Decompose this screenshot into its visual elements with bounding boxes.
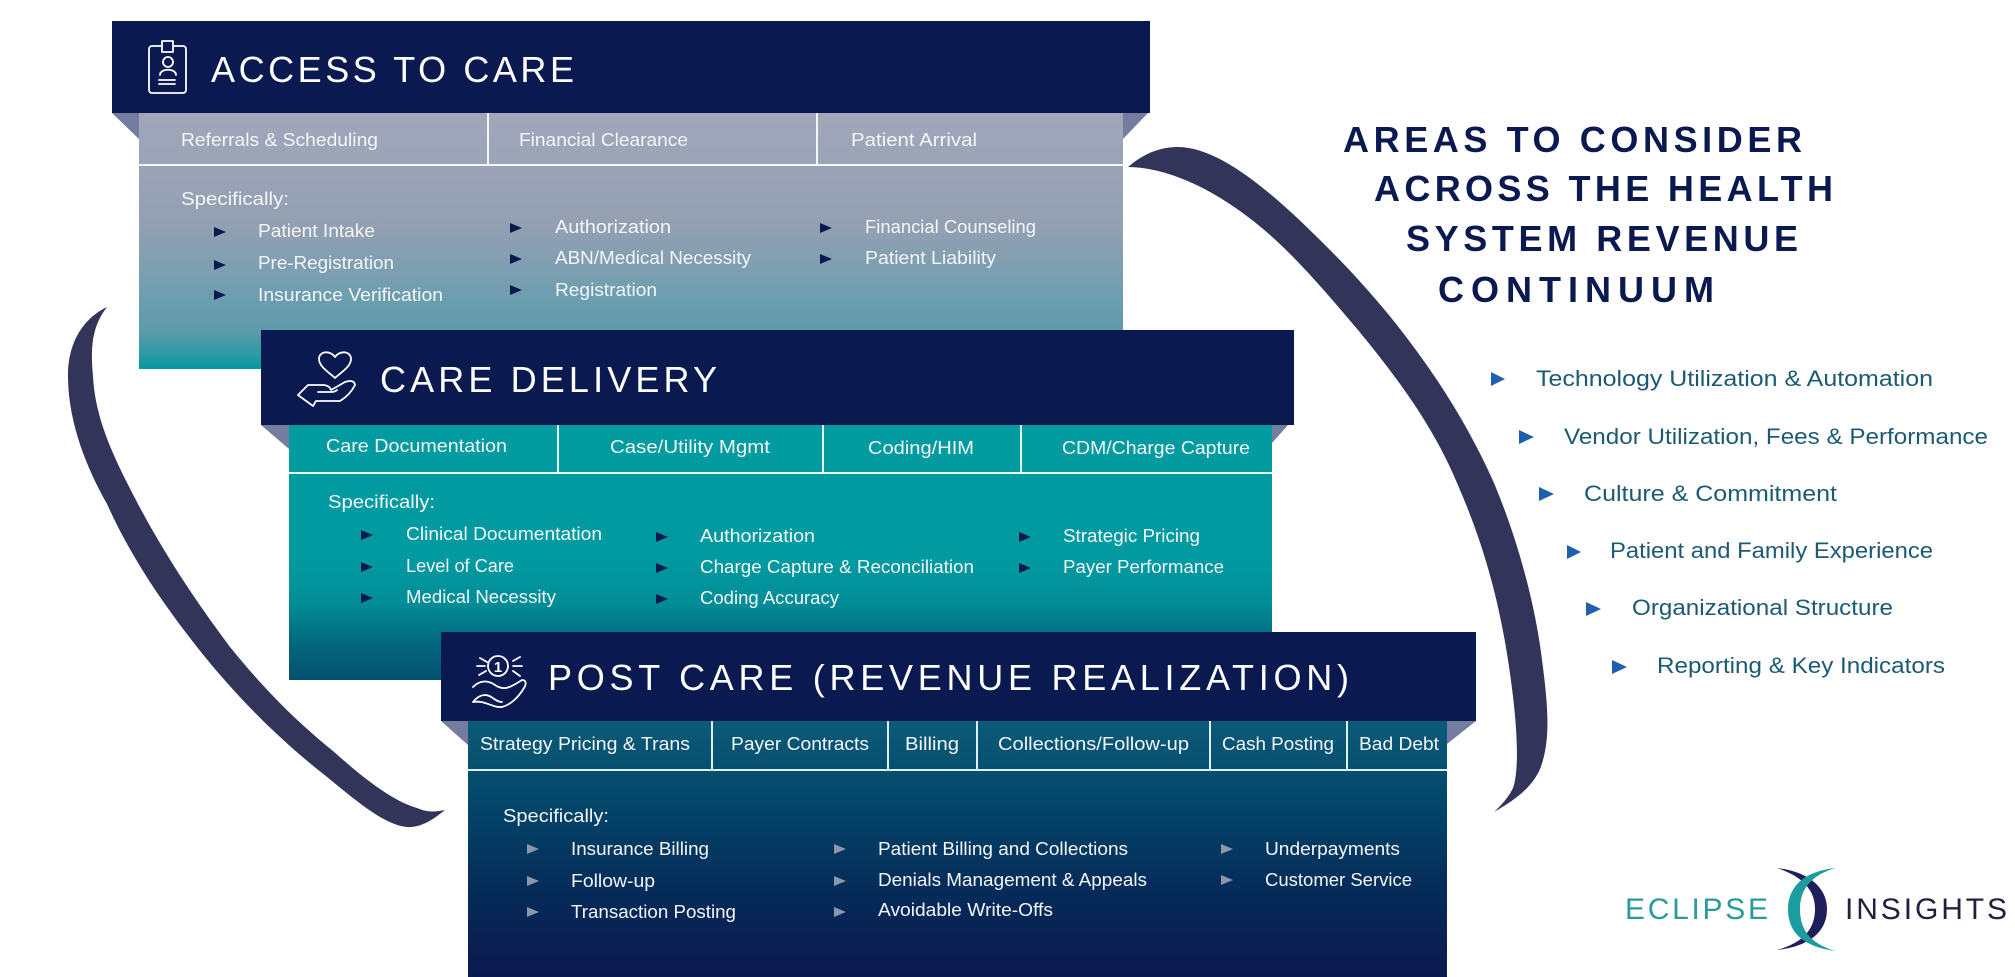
tab row [468, 721, 1447, 770]
tab row: Referrals & Scheduling [181, 129, 378, 150]
specifics list: Clinical Documentation [406, 523, 602, 544]
specifics list: Coding Accuracy [700, 587, 840, 608]
list: areas to consider: Reporting & Key Indicators [1657, 653, 1945, 678]
list: areas to consider: Culture & Commitment [1584, 481, 1837, 506]
arrow: left curved swoosh [68, 307, 445, 827]
header band [441, 632, 1476, 721]
specifics list: Patient Liability [865, 247, 997, 268]
logo: eclipse insights: INSIGHTS [1845, 893, 2007, 926]
specifics list: Denials Management & Appeals [878, 869, 1147, 890]
list: areas to consider: Organizational Structure [1632, 595, 1893, 620]
header band [261, 330, 1294, 425]
specifics list: Avoidable Write-Offs [878, 899, 1053, 920]
specifics list: Specifically: [181, 188, 289, 209]
title: areas to consider [1343, 119, 1833, 310]
tab row: Collections/Follow-up [998, 733, 1189, 754]
specifics list: Level of Care [406, 555, 514, 576]
specifics list: Strategic Pricing [1063, 525, 1200, 546]
header wedges [112, 113, 1148, 139]
title: areas to consider: SYSTEM REVENUE [1406, 218, 1798, 259]
specifics list: Underpayments [1265, 838, 1400, 859]
specifics list: ABN/Medical Necessity [555, 247, 752, 268]
icon: coin over hand [473, 656, 526, 707]
logo: eclipse insights: ECLIPSE [1625, 893, 1768, 926]
list: areas to consider [1491, 366, 1988, 678]
title: areas to consider: ACROSS THE HEALTH [1374, 168, 1833, 209]
specifics list: Authorization [555, 216, 671, 237]
tab row: Case/Utility Mgmt [610, 436, 770, 457]
panel body [468, 721, 1447, 977]
tab row: CDM/Charge Capture [1062, 437, 1250, 458]
panel body [139, 113, 1123, 369]
specifics list [328, 491, 1224, 608]
specifics list: Payer Performance [1063, 556, 1224, 577]
specifics list: Financial Counseling [865, 216, 1036, 237]
heading: ACCESS TO CARE [211, 49, 574, 90]
specifics list [181, 188, 1036, 305]
specifics list: Medical Necessity [406, 586, 557, 607]
list: areas to consider: Technology Utilization & Automation [1536, 366, 1933, 391]
specifics list: Transaction Posting [571, 901, 736, 922]
header wedges [441, 721, 1476, 745]
specifics list: Insurance Verification [258, 284, 443, 305]
specifics list: Specifically: [503, 805, 609, 826]
specifics list: Patient Billing and Collections [878, 838, 1128, 859]
title: areas to consider: AREAS TO CONSIDER [1343, 119, 1802, 160]
tab row [289, 425, 1272, 473]
header band [112, 21, 1150, 113]
title: areas to consider: CONTINUUM [1438, 269, 1714, 310]
specifics list: Specifically: [328, 491, 435, 512]
icon: id badge [149, 41, 186, 93]
tab row: Financial Clearance [519, 129, 688, 150]
tab row: Payer Contracts [731, 733, 869, 754]
specifics list: Registration [555, 279, 657, 300]
tab row: Patient Arrival [851, 129, 977, 150]
specifics list: Patient Intake [258, 220, 375, 241]
specifics list: Charge Capture & Reconciliation [700, 556, 974, 577]
specifics list: Insurance Billing [571, 838, 709, 859]
tab row: Care Documentation [326, 435, 507, 456]
tab row: Cash Posting [1222, 733, 1334, 754]
specifics list: Authorization [700, 525, 815, 546]
panel: access to care [112, 21, 1150, 369]
tab row [139, 113, 1123, 165]
logo: eclipse insights [1625, 868, 2007, 951]
tab row: Bad Debt [1359, 733, 1439, 754]
list: areas to consider: Vendor Utilization, Fees & Performance [1564, 424, 1988, 449]
list: areas to consider: Patient and Family Experience [1610, 538, 1933, 563]
tab row: Coding/HIM [868, 437, 974, 458]
panel: care delivery [261, 330, 1294, 680]
heading: CARE DELIVERY [380, 359, 717, 400]
tab row: Strategy Pricing & Trans [480, 733, 690, 754]
arrow: right curved swoosh [1128, 147, 1547, 812]
panel: post care [441, 632, 1476, 977]
panel body [289, 425, 1272, 680]
specifics list [503, 805, 1412, 922]
specifics list: Follow-up [571, 870, 655, 891]
specifics list: Pre-Registration [258, 252, 394, 273]
tab row: Billing [905, 733, 959, 754]
specifics list: Customer Service [1265, 869, 1412, 890]
icon: heart in hand [298, 352, 355, 406]
heading: POST CARE (REVENUE REALIZATION) [548, 657, 1349, 698]
header wedges [261, 425, 1288, 449]
icon: coin over hand: 1 [494, 659, 502, 676]
